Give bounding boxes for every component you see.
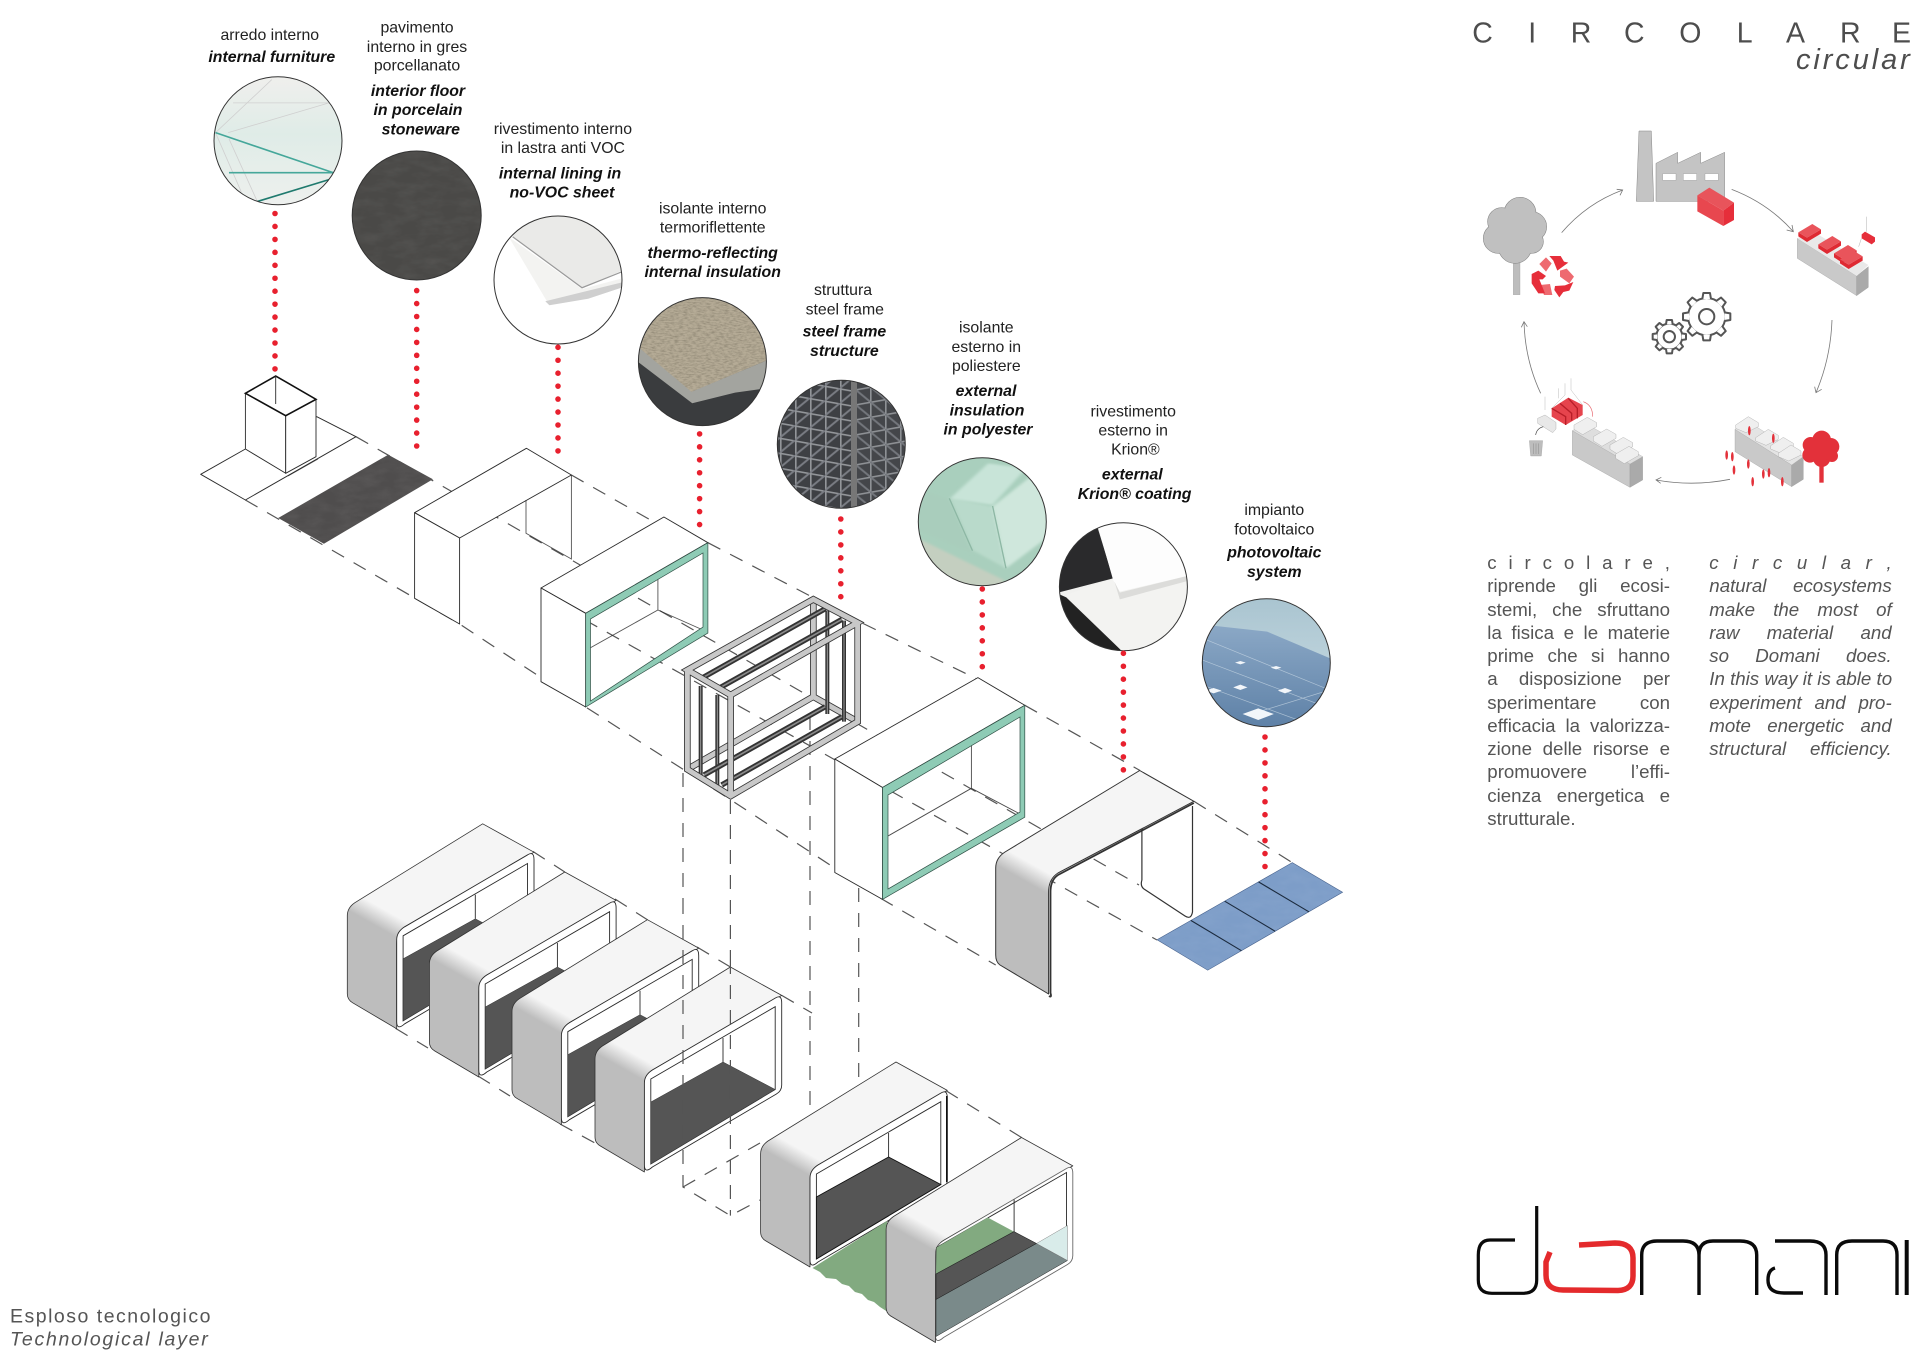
icon: factory	[1636, 131, 1734, 226]
text block: english: structural efficiency.	[1709, 738, 1892, 759]
label: interior floor: porcellanato	[374, 58, 460, 75]
arrow: use to dismantling	[1656, 477, 1730, 483]
material circle: porcelain stoneware	[352, 151, 481, 280]
label: Krion coating: Krion® coating	[1078, 486, 1192, 503]
label: internal insulation	[644, 200, 781, 281]
label: internal furniture: arredo interno	[220, 27, 319, 44]
label: photovoltaic	[1226, 502, 1322, 581]
label: internal lining: in lastra anti VOC	[501, 140, 625, 157]
logo: domani	[1478, 1206, 1907, 1295]
material circle: photovoltaic	[1202, 599, 1330, 726]
text block: italian: promuovere l’effi-	[1487, 761, 1670, 782]
module 5	[761, 1062, 947, 1267]
module 4	[595, 967, 782, 1172]
text block: english: raw material and	[1709, 622, 1892, 643]
label: internal insulation: isolante interno	[659, 200, 767, 218]
caption: technological layer: Technological layer	[10, 1329, 209, 1351]
text block: italian: riprende gli ecosi-	[1487, 575, 1670, 596]
material circle: steel frame structure	[776, 380, 908, 510]
material circle: Krion coating	[1060, 528, 1187, 650]
text block: italian: strutturale.	[1487, 808, 1576, 829]
label: external insulation: poliestere	[952, 358, 1021, 375]
label: interior floor: interior floor	[371, 83, 466, 100]
label: photovoltaic: photovoltaic	[1226, 545, 1322, 562]
vertical guides over the module row	[683, 900, 760, 1216]
arrow: dismantling to tree	[1521, 322, 1541, 393]
text block: italian: efficacia la valorizza-	[1487, 715, 1670, 736]
icon: building dismantling and trash	[1529, 378, 1643, 487]
text block: italian: a disposizione per	[1487, 668, 1670, 689]
arrow: factory to building	[1732, 189, 1793, 232]
label: interior floor: pavimento	[380, 20, 454, 37]
label: external insulation: external	[956, 383, 1017, 400]
icon: building with red blocks	[1797, 217, 1875, 296]
label: external insulation: in polyester	[944, 422, 1033, 439]
label: Krion coating: Krion®	[1111, 442, 1160, 459]
material circle: internal furniture glass	[213, 76, 343, 206]
exploded layer: photovoltaic panels	[1157, 863, 1343, 970]
text block: italian: zione delle risorse e	[1487, 738, 1670, 759]
text block: italian: cienza energetica e	[1487, 784, 1670, 806]
label: photovoltaic: fotovoltaico	[1234, 521, 1315, 538]
arrow: building to use	[1815, 320, 1832, 393]
icon: building in use with red tree and people	[1725, 417, 1839, 487]
label: internal insulation: termoriflettente	[660, 220, 766, 237]
label: internal lining: internal lining in	[499, 165, 621, 182]
label: interior floor: interno in gres	[367, 39, 467, 56]
material circle: thermo-reflecting insulation	[638, 298, 766, 426]
exploded layer: steel frame	[687, 599, 858, 796]
icon: gray tree and recycling	[1483, 197, 1574, 297]
module 2	[429, 872, 616, 1077]
text block: english: natural ecosystems	[1709, 575, 1892, 596]
label: internal lining: rivestimento interno	[494, 121, 632, 138]
exploded layer: internal insulation	[541, 517, 708, 707]
text block: italian: la fisica e le materie	[1487, 622, 1670, 643]
caption: technological layer: Esploso tecnologico	[10, 1305, 212, 1327]
icon: gears	[1653, 293, 1730, 353]
text block: english: so Domani does.	[1709, 645, 1892, 666]
text block: english: mote energetic and	[1709, 715, 1892, 736]
dashed guide rails of the exploded view	[245, 437, 1292, 1143]
circle outlines	[214, 77, 1330, 727]
text block: english: experiment and pro-	[1709, 692, 1892, 712]
garden lawn	[812, 1221, 887, 1312]
exploded layer: external insulation	[835, 678, 1025, 899]
label: external insulation: esterno in	[952, 339, 1021, 356]
label: internal furniture	[208, 27, 335, 66]
module pair with garden	[761, 1062, 1073, 1342]
label: steel frame: steel frame	[803, 324, 886, 341]
exploded layer: Krion coating	[996, 770, 1194, 997]
material circle: polyester insulation	[914, 455, 1048, 588]
text block: english: c i r c u l a r ,	[1709, 552, 1892, 573]
text block: italian: sperimentare con	[1487, 692, 1670, 712]
label: internal insulation: thermo-reflecting	[648, 245, 778, 262]
module 3	[512, 920, 699, 1125]
label: external insulation	[944, 320, 1033, 439]
title: circolare: CIRCOLARE	[1472, 17, 1911, 49]
text block: italian: prime che si hanno	[1487, 645, 1670, 666]
label: internal furniture: internal furniture	[208, 49, 335, 66]
caption: technological layer	[10, 1305, 212, 1351]
label: interior floor: stoneware	[382, 121, 460, 138]
text block: italian	[1487, 552, 1670, 829]
exploded layer: internal furniture	[201, 376, 356, 500]
label: interior floor	[367, 20, 467, 138]
label: photovoltaic: system	[1247, 564, 1302, 581]
label: Krion coating: rivestimento	[1090, 403, 1176, 420]
label: steel frame	[803, 282, 886, 360]
circular economy diagram	[1483, 131, 1875, 487]
subtitle: circular: circular	[1796, 44, 1913, 76]
label: internal insulation: internal insulation	[644, 264, 781, 281]
exploded layer: interior floor	[278, 455, 433, 544]
label: external insulation: insulation	[950, 403, 1025, 420]
label: steel frame: steel frame	[806, 301, 884, 318]
label: steel frame: structure	[810, 343, 879, 360]
module 1	[347, 824, 534, 1029]
label: internal lining: no-VOC sheet	[510, 184, 615, 202]
arrow: tree to factory	[1562, 189, 1623, 233]
label: Krion coating	[1078, 403, 1192, 503]
label: interior floor: in porcelain	[374, 102, 463, 119]
label: steel frame: struttura	[814, 282, 872, 299]
module 6 with glass and lawn	[886, 1138, 1073, 1342]
red dotted leader lines	[275, 214, 1265, 868]
text block: italian: stemi, che sfruttano	[1487, 598, 1670, 620]
text block: english: make the most of	[1709, 598, 1892, 620]
label: Krion coating: esterno in	[1098, 423, 1168, 440]
module row: four assembled modules	[347, 824, 782, 1172]
material circle: no-VOC sheet	[510, 216, 622, 306]
text block: english: In this way it is able to	[1709, 668, 1892, 689]
label: Krion coating: external	[1102, 466, 1163, 483]
text block: english	[1709, 552, 1894, 759]
label: external insulation: isolante	[959, 320, 1014, 337]
exploded layer: internal lining	[415, 448, 571, 624]
label: photovoltaic: impianto	[1244, 502, 1304, 519]
text block: italian: c i r c o l a r e ,	[1487, 552, 1670, 573]
label: internal lining	[494, 121, 632, 202]
